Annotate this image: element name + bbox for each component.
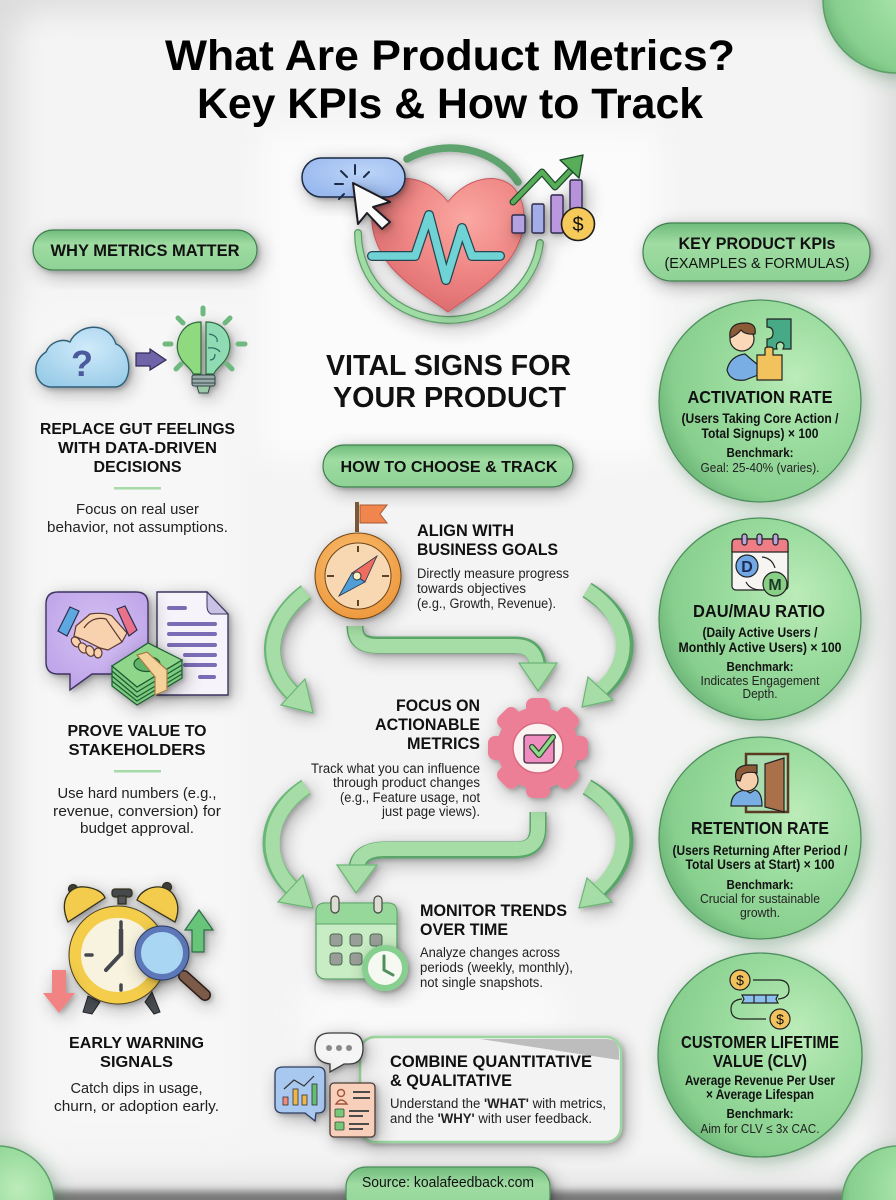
dollar coin <box>562 208 594 240</box>
icon: cloud question to brain bulb <box>36 308 245 393</box>
panel: activation rate: (Users Taking Core Action / <box>682 411 839 426</box>
panel: dau/mau ratio: M <box>768 577 782 594</box>
panel: activation rate: Benchmark: <box>726 445 794 460</box>
title <box>165 32 735 128</box>
panel: retention rate: Total Users at Start) × 100 <box>686 857 834 872</box>
heading: vital signs: VITAL SIGNS FOR <box>326 350 571 382</box>
text block: monitor trends: OVER TIME <box>420 921 508 939</box>
text block: early warning <box>54 1035 219 1115</box>
down arrow <box>43 970 75 1013</box>
handshake <box>58 606 137 658</box>
clock hands <box>86 922 121 990</box>
panel: combine quantitative and qualitative: & QUALITATIVE <box>390 1072 512 1090</box>
panel: retention rate: (Users Returning After Period / <box>672 843 848 858</box>
icon: feedback and charts <box>275 1033 375 1137</box>
bulb <box>177 322 230 393</box>
text block: align with business goals: (e.g., Growth, Revenue). <box>417 596 556 611</box>
needle <box>352 556 377 582</box>
text block: monitor trends: Analyze changes across <box>420 945 560 960</box>
text block: replace gut feelings: Focus on real user <box>76 502 199 518</box>
text block: align with business goals: ALIGN WITH <box>417 522 514 540</box>
icon: person at door <box>731 754 788 812</box>
text block: replace gut feelings: DECISIONS <box>94 459 182 476</box>
panel: customer lifetime value: CUSTOMER LIFETIME <box>681 1032 839 1052</box>
ring arcs <box>358 148 540 320</box>
panel: customer lifetime value: $ <box>736 972 744 988</box>
icon: calendar D to M <box>732 534 788 596</box>
panel: activation rate: Total Signups) × 100 <box>702 426 818 441</box>
panel: customer lifetime value: × Average Lifespan <box>706 1087 814 1102</box>
text block: align with business goals <box>417 522 569 611</box>
panel: combine quantitative and qualitative: Understand the 'WHAT' with metrics, <box>390 1096 606 1111</box>
text block: replace gut feelings: WITH DATA-DRIVEN <box>58 440 217 457</box>
panel: dau/mau ratio: Benchmark: <box>726 659 794 674</box>
panel: combine quantitative and qualitative <box>360 1037 621 1142</box>
corner decoration: top right <box>823 0 896 73</box>
text block: early warning: Catch dips in usage, <box>70 1081 202 1097</box>
pill: key product kpis: (EXAMPLES & FORMULAS) <box>664 255 850 272</box>
document <box>157 592 228 695</box>
icon: heart with pulse, click and growth chart: $ <box>572 214 584 236</box>
checkbox <box>524 735 554 763</box>
up arrow <box>185 910 213 952</box>
panel: customer lifetime value: Benchmark: <box>726 1106 794 1121</box>
text block: focus on actionable metrics: METRICS <box>407 735 480 753</box>
icon: cloud question to brain bulb: ? <box>71 343 93 384</box>
panel: dau/mau ratio: Monthly Active Users) × 100 <box>678 640 842 655</box>
speech bubble <box>315 1033 363 1072</box>
text block: replace gut feelings: REPLACE GUT FEELINGS <box>40 421 235 438</box>
text block: early warning: SIGNALS <box>100 1054 173 1071</box>
panel: dau/mau ratio: DAU/MAU RATIO <box>693 601 825 621</box>
chart bubble <box>275 1067 325 1121</box>
panel: activation rate: Geal: 25-40% (varies). <box>700 460 820 475</box>
pulse line <box>372 215 500 280</box>
text block: monitor trends: not single snapshots. <box>420 975 543 990</box>
clock badge <box>365 948 405 988</box>
compass body <box>320 538 396 614</box>
text block: focus on actionable metrics <box>311 697 480 819</box>
icon: alarm clock and magnifier <box>43 882 213 1014</box>
pill: why metrics matter <box>33 230 257 270</box>
text block: prove value: Use hard numbers (e.g., <box>58 786 216 802</box>
arrow: goals right <box>582 590 625 707</box>
panel: retention rate: RETENTION RATE <box>691 818 829 838</box>
panel: retention rate: Benchmark: <box>726 877 794 892</box>
pill: key product kpis: KEY PRODUCT KPIs <box>678 234 836 253</box>
arrow: lower right <box>579 787 625 908</box>
panel: retention rate: growth. <box>740 905 780 920</box>
text block: focus on actionable metrics: Track what you can influence <box>311 761 480 776</box>
icon: person with puzzle <box>727 319 791 380</box>
text block: focus on actionable metrics: through product changes <box>333 775 480 790</box>
arrow: lower left <box>271 787 313 908</box>
arrow <box>136 349 166 370</box>
text block: replace gut feelings: behavior, not assumptions. <box>47 520 228 536</box>
panel: customer lifetime value: VALUE (CLV) <box>713 1051 807 1071</box>
text block: align with business goals: BUSINESS GOALS <box>417 541 558 559</box>
title: Key KPIs & How to Track <box>197 80 703 128</box>
icon: gear with checkbox <box>488 698 588 798</box>
text block: focus on actionable metrics: FOCUS ON <box>396 697 480 715</box>
pill: key product kpis <box>643 223 870 281</box>
form card <box>330 1083 375 1137</box>
text block: early warning: churn, or adoption early. <box>54 1099 219 1115</box>
panel: customer lifetime value <box>658 953 862 1157</box>
pill: source: Source: koalafeedback.com <box>362 1174 534 1191</box>
panel: retention rate: Crucial for sustainable <box>700 891 820 906</box>
panel: dau/mau ratio: Depth. <box>742 686 778 701</box>
pill: source <box>346 1167 550 1200</box>
text block: early warning: EARLY WARNING <box>69 1035 204 1052</box>
click button <box>302 158 405 197</box>
icon: coin flow <box>730 970 790 1029</box>
text block: prove value: PROVE VALUE TO <box>68 723 206 740</box>
icon: heart with pulse, click and growth chart <box>302 148 594 320</box>
text block: monitor trends: periods (weekly, monthly), <box>420 960 573 975</box>
panel: combine quantitative and qualitative: COMBINE QUANTITATIVE <box>390 1053 592 1071</box>
panel: dau/mau ratio <box>659 518 861 720</box>
arrows between steps <box>271 590 625 908</box>
text block: focus on actionable metrics: just page views). <box>381 804 480 819</box>
text block: monitor trends: MONITOR TRENDS <box>420 902 567 920</box>
text block: align with business goals: towards objectives <box>417 581 526 596</box>
panel: activation rate: ACTIVATION RATE <box>688 387 832 407</box>
panel: retention rate <box>659 737 861 939</box>
corner decoration: bottom right <box>842 1146 896 1200</box>
cloud <box>36 327 129 387</box>
text block: focus on actionable metrics: ACTIONABLE <box>375 716 480 734</box>
panel: customer lifetime value: Aim for CLV ≤ 3x CAC. <box>700 1121 820 1136</box>
money stack <box>112 643 182 705</box>
panel: customer lifetime value: $ <box>776 1011 784 1027</box>
text block: prove value: STAKEHOLDERS <box>68 742 206 759</box>
panel: dau/mau ratio: (Daily Active Users / <box>702 625 818 640</box>
panel: activation rate <box>659 300 861 502</box>
arrow: actionable to trends <box>337 812 538 893</box>
panel: customer lifetime value: Average Revenue Per User <box>685 1073 836 1088</box>
heart <box>372 179 524 312</box>
pill: why metrics matter: WHY METRICS MATTER <box>50 242 240 260</box>
text block: prove value <box>53 723 221 837</box>
title: What Are Product Metrics? <box>165 32 735 80</box>
heading: vital signs: YOUR PRODUCT <box>333 382 566 414</box>
text block: prove value: budget approval. <box>80 821 194 837</box>
growth arrow <box>513 155 583 202</box>
pill: how to choose and track: HOW TO CHOOSE & TRACK <box>340 459 558 476</box>
feet <box>83 992 160 1014</box>
corner decoration: bottom left <box>0 1146 54 1200</box>
icon: handshake, document, money <box>46 592 228 705</box>
arrow: goals to actionable <box>355 626 557 691</box>
bulb rays <box>165 308 245 369</box>
text block: prove value: revenue, conversion) for <box>53 804 221 820</box>
text block: align with business goals: Directly measure progress <box>417 566 569 581</box>
icon: compass with flag <box>315 502 401 619</box>
text block: replace gut feelings <box>40 421 235 536</box>
speech bubble <box>46 592 148 690</box>
cursor <box>353 183 390 229</box>
clock face <box>75 912 161 998</box>
panel: dau/mau ratio: D <box>741 559 753 576</box>
growth bars <box>512 180 582 233</box>
icon: calendar with clock <box>316 896 405 988</box>
heading: vital signs <box>326 350 571 414</box>
magnifier <box>135 926 205 995</box>
text block: focus on actionable metrics: (e.g., Feature usage, not <box>340 790 480 805</box>
text block: monitor trends <box>420 902 573 990</box>
panel: combine quantitative and qualitative: and the 'WHY' with user feedback. <box>390 1111 592 1126</box>
arrow: goals to trends upper left <box>272 592 313 713</box>
panel: dau/mau ratio: Indicates Engagement <box>700 673 820 688</box>
flag <box>355 502 359 532</box>
pill: how to choose and track <box>323 445 573 487</box>
bells <box>64 882 178 922</box>
gear <box>488 698 588 798</box>
